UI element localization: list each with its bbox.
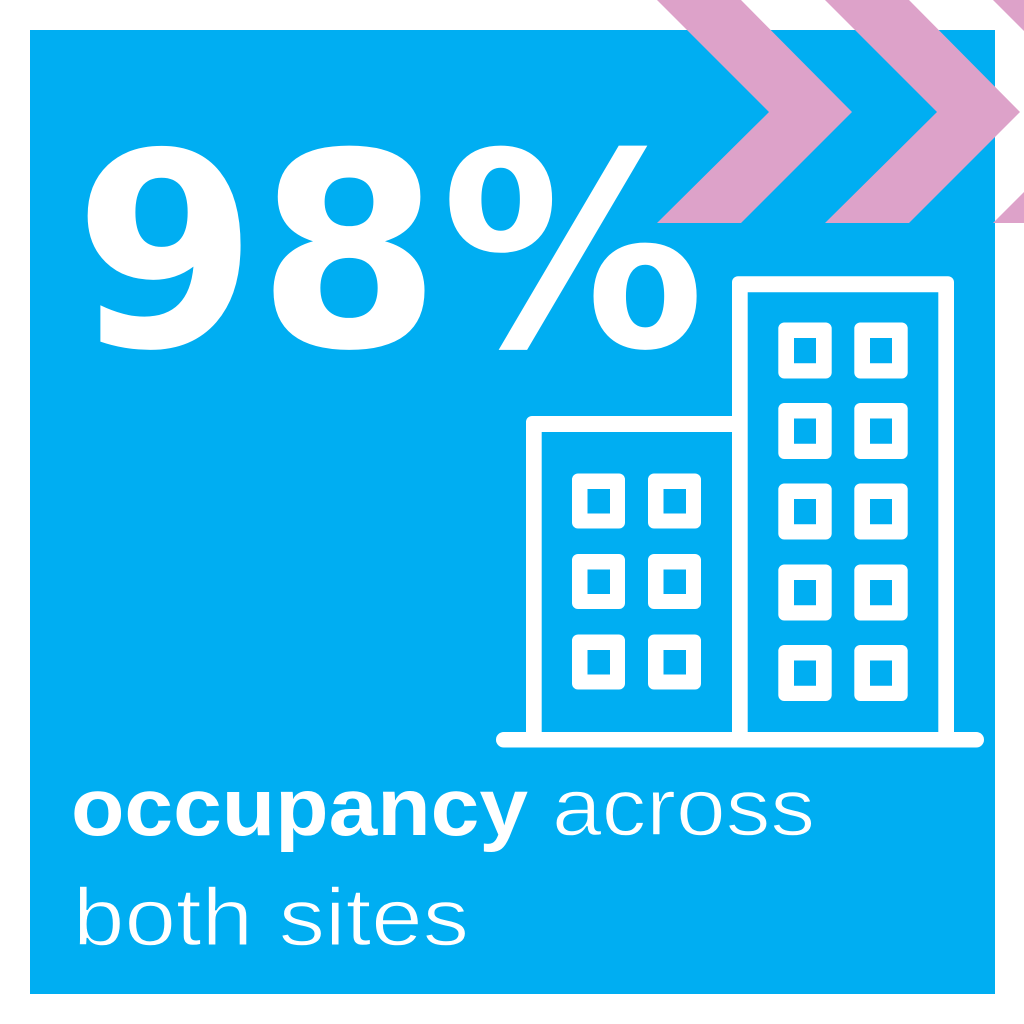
text: occupancy across — [71, 762, 815, 853]
left building windows — [572, 474, 701, 690]
right building — [732, 276, 954, 736]
text: occupancy across: across — [552, 762, 815, 853]
icon: pink chevron arrows — [657, 0, 1024, 223]
heading: 98%: 98% — [74, 95, 705, 410]
ground line — [496, 732, 984, 748]
icon: buildings — [496, 276, 984, 748]
left building — [526, 416, 736, 736]
text: occupancy across: occupancy — [71, 762, 528, 853]
text: both sites: both sites — [73, 872, 469, 963]
right building windows — [778, 322, 908, 701]
